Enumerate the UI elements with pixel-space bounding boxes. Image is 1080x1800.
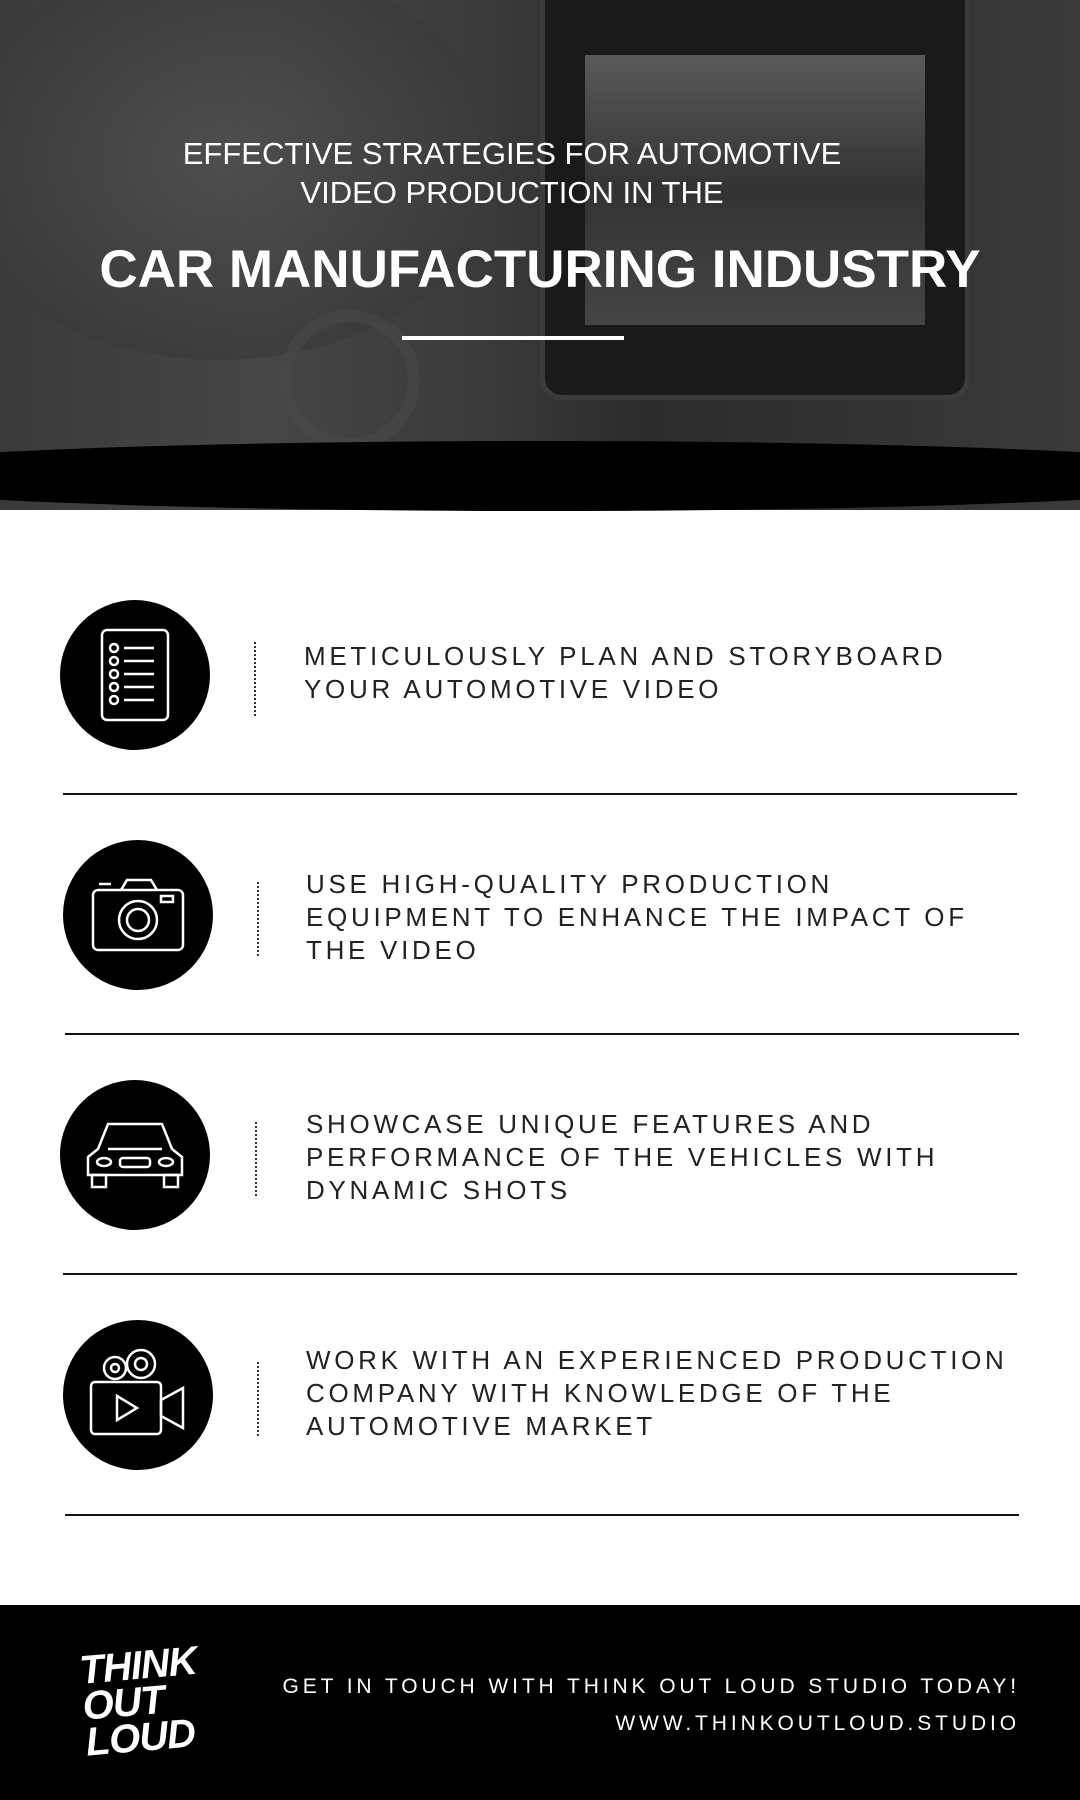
footer (0, 1605, 1080, 1800)
icon: checklist (60, 600, 210, 750)
text 1: METICULOUSLY PLAN AND STORYBOARD (304, 641, 946, 671)
text 3: DYNAMIC SHOTS (306, 1175, 571, 1205)
logo: OUT (81, 1678, 166, 1729)
row 1 (60, 600, 946, 750)
text 1: YOUR AUTOMOTIVE VIDEO (304, 674, 722, 704)
row 2 (63, 840, 968, 990)
header title: EFFECTIVE STRATEGIES FOR AUTOMOTIVE (183, 136, 841, 171)
text 4: COMPANY WITH KNOWLEDGE OF THE (306, 1378, 894, 1408)
footer text: GET IN TOUCH WITH THINK OUT LOUD STUDIO TODAY! (282, 1675, 1020, 1698)
row 3 (60, 1080, 938, 1230)
text 3: PERFORMANCE OF THE VEHICLES WITH (306, 1142, 938, 1172)
header title (99, 136, 981, 299)
logo: THINK (78, 1639, 198, 1693)
text 3: SHOWCASE UNIQUE FEATURES AND (306, 1109, 874, 1139)
footer text: WWW.THINKOUTLOUD.STUDIO (615, 1712, 1020, 1735)
text 4 (306, 1345, 1008, 1441)
text 4: WORK WITH AN EXPERIENCED PRODUCTION (306, 1345, 1008, 1375)
header photo background (0, 0, 1080, 510)
dashcam device (540, 0, 970, 400)
header title: VIDEO PRODUCTION IN THE (300, 175, 724, 210)
text 3 (306, 1109, 938, 1205)
black ellipse band (0, 441, 1080, 511)
icon: car (60, 1080, 210, 1230)
row 4 (63, 1320, 1008, 1470)
text 2: EQUIPMENT TO ENHANCE THE IMPACT OF (306, 902, 968, 932)
logo (78, 1639, 198, 1765)
text 2: THE VIDEO (306, 935, 479, 965)
title underline (402, 336, 624, 340)
icon: video camera (63, 1320, 213, 1470)
text 4: AUTOMOTIVE MARKET (306, 1411, 656, 1441)
icon: camera (63, 840, 213, 990)
logo: LOUD (84, 1711, 197, 1765)
text 2 (306, 869, 968, 965)
text 1 (304, 641, 946, 704)
header title: CAR MANUFACTURING INDUSTRY (99, 240, 981, 299)
text 2: USE HIGH-QUALITY PRODUCTION (306, 869, 833, 899)
footer text (282, 1675, 1020, 1735)
